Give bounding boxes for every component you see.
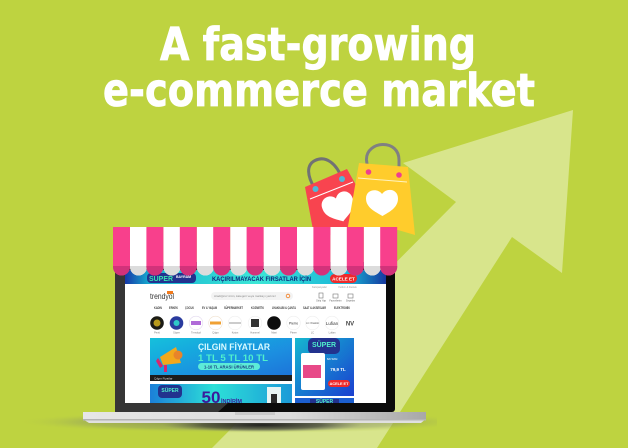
- brand circles: NV: [346, 322, 354, 328]
- second banner: SÜPER: [161, 387, 179, 394]
- navigation: AYAKKABI & ÇANTA: [272, 306, 296, 310]
- brand circles: LC Waikiki: [306, 321, 319, 325]
- navigation: EV & YAŞAM: [202, 306, 217, 310]
- brand labels: Mavi: [271, 332, 277, 334]
- brand labels: Penti: [154, 332, 160, 334]
- laptop base: [83, 412, 426, 423]
- promo banner: SUPER: [149, 276, 173, 283]
- hero banner: 1 TL 5 TL 10 TL: [198, 353, 269, 363]
- trendyol header: Sepetim: [346, 300, 355, 302]
- trendyol header: [150, 286, 357, 302]
- hero banner: Çılgın Fiyatlar: [154, 376, 173, 380]
- brand circles: Lufian: [326, 321, 339, 326]
- navigation: KADIN: [154, 306, 162, 310]
- laptop screen frame: [115, 262, 395, 412]
- brand labels: Çılgın: [212, 332, 219, 334]
- website screen: [125, 270, 386, 407]
- title: A fast-growing: [160, 18, 476, 71]
- trendyol header: Aradığınız ürün, kategori veya markayı yazınız: [214, 294, 276, 298]
- trendyol header: Giriş Yap: [316, 300, 327, 302]
- icon: red shopping bag: [305, 159, 359, 235]
- brand labels: LC: [311, 332, 314, 334]
- brand labels: Trendyol: [191, 332, 201, 334]
- navigation: ÇOCUK: [185, 306, 194, 310]
- brand labels: Süper: [173, 332, 180, 334]
- hero banner: [150, 338, 292, 381]
- trendyol header: trendyol: [150, 292, 174, 301]
- brand labels: [154, 332, 336, 334]
- side banner: 79,9 TL: [330, 367, 346, 372]
- laptop shadow: [54, 417, 436, 432]
- promo banner: BAYRAM: [176, 275, 191, 279]
- laptop: [83, 262, 426, 423]
- brand labels: Pierre: [290, 332, 297, 334]
- second banner: [150, 384, 292, 403]
- navigation: ELEKTRONİK: [334, 306, 350, 310]
- promo banner: ACELE ET: [332, 276, 355, 282]
- white stripe undersides: [130, 266, 381, 276]
- navigation: SAAT & AKSESUAR: [303, 306, 326, 310]
- navigation: ERKEK: [169, 306, 178, 310]
- growth arrow: [212, 110, 573, 448]
- trendyol header: Favorilerim: [329, 300, 342, 302]
- brand labels: Koton: [232, 332, 239, 334]
- white stripes: [130, 227, 381, 276]
- promo banner: KAÇIRILMAYACAK FIRSATLAR İÇİN: [212, 276, 311, 283]
- navigation: KOZMETİK: [251, 306, 264, 310]
- awning: [113, 227, 397, 276]
- lower side banner: [295, 398, 354, 403]
- trendyol header: Yardım & Destek: [338, 286, 357, 289]
- title: [103, 18, 535, 117]
- brand labels: Hummel: [250, 332, 260, 334]
- side banner: ACELE ET: [330, 382, 349, 386]
- pink stripe undersides: [113, 266, 397, 276]
- lower side banner: SÜPER: [316, 398, 333, 405]
- hero banner: ÇILGIN FİYATLAR: [198, 342, 270, 352]
- icon: yellow shopping bag: [347, 144, 415, 235]
- title: e-commerce market: [103, 64, 535, 117]
- side banner: [295, 338, 354, 396]
- pink stripes: [113, 227, 397, 276]
- promo banner: [125, 270, 386, 284]
- second banner: 50: [202, 388, 220, 407]
- navigation: [154, 306, 350, 310]
- side banner: BAYRAM: [327, 358, 337, 361]
- second banner: İNDİRİM: [221, 398, 242, 405]
- navigation: SÜPERMARKET: [224, 306, 243, 310]
- side banner: SÜPER: [312, 340, 336, 349]
- brand labels: Lufian: [329, 332, 336, 334]
- brand circles: [150, 316, 354, 330]
- brand circles: Pierre: [289, 322, 298, 326]
- trendyol header: Kampanyalar: [312, 286, 327, 289]
- hero banner: 1-10 TL ARASI ÜRÜNLER: [204, 364, 255, 370]
